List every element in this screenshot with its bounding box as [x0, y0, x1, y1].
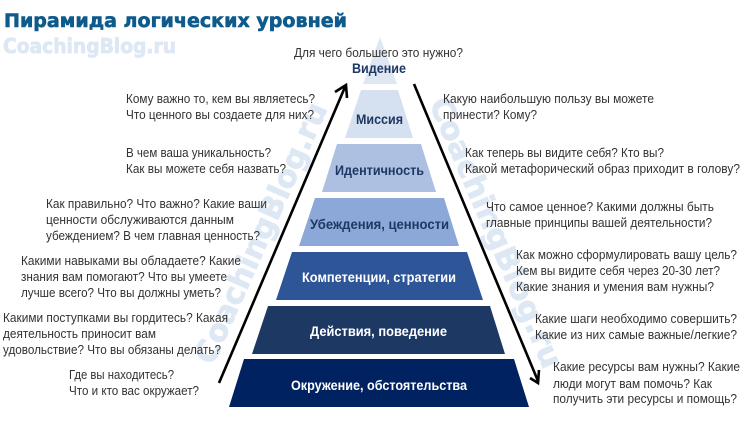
questions: environment, right: люди могут вам помочь? Как — [553, 376, 712, 391]
questions: identity, right: Как теперь вы видите себя? Кто вы? — [465, 145, 664, 160]
level: identity — [322, 144, 436, 192]
questions: competencies, right — [516, 247, 737, 294]
level: vision — [352, 37, 406, 84]
level: actions and behavior — [252, 306, 505, 354]
level: vision: Видение — [352, 60, 406, 76]
questions: beliefs, right: Что самое ценное? Какими должны быть — [486, 199, 714, 214]
questions: actions, left: Какими поступками вы гордитесь? Какая — [3, 310, 228, 325]
level: beliefs and values — [299, 198, 459, 246]
questions: beliefs, left: ценности обслуживаются данным — [46, 212, 234, 227]
questions: actions, left: удовольствие? Что вы обязаны делать? — [3, 342, 221, 357]
questions: competencies, left: знания вам помогают? Что вы умеете — [21, 269, 227, 284]
questions: mission, right — [443, 91, 654, 122]
questions: identity, left: Как вы можете себя назвать? — [126, 161, 286, 176]
questions: environment, left: Что и кто вас окружает? — [69, 383, 199, 398]
level: beliefs and values: Убеждения, ценности — [310, 216, 449, 232]
watermark: top-left site name: CoachingBlog.ru — [3, 34, 176, 58]
questions: environment, right — [553, 359, 740, 406]
questions: mission, left: Что ценного вы создаете для них? — [126, 107, 314, 122]
level: competencies and strategies: Компетенции, стратегии — [302, 269, 456, 285]
questions: actions, right — [535, 311, 737, 342]
level: mission: Миссия — [356, 111, 403, 127]
questions: beliefs, left: убеждением? В чем главная ценность? — [46, 228, 260, 243]
questions: competencies, left: лучше всего? Что вы должны уметь? — [21, 285, 221, 300]
watermark: right diagonal: CoachingBlog.ru — [422, 92, 569, 373]
questions: environment, right: Какие ресурсы вам нужны? Какие — [553, 359, 740, 374]
questions: beliefs, right: главные принципы вашей деятельности? — [486, 215, 712, 230]
pyramid — [229, 37, 529, 407]
questions: actions, right: Какие шаги необходимо совершить? — [535, 311, 737, 326]
questions: environment, right: получить эти ресурсы и помощь? — [553, 391, 737, 406]
questions: identity, left: В чем ваша уникальность? — [126, 145, 271, 160]
level: competencies and strategies — [276, 252, 483, 300]
questions: identity, right — [465, 145, 740, 176]
questions: identity, left — [126, 145, 286, 176]
questions: mission, left: Кому важно то, кем вы являетесь? — [126, 91, 315, 106]
questions: mission, right: Какую наибольшую пользу вы можете — [443, 91, 654, 106]
questions: beliefs, left — [46, 196, 267, 243]
level: mission — [345, 90, 413, 138]
questions: mission, right: принести? Кому? — [443, 107, 537, 122]
title: Пирамида логических уровней — [4, 10, 347, 32]
questions: actions, left — [3, 310, 228, 357]
questions: competencies, left: Какими навыками вы обладаете? Какие — [21, 253, 241, 268]
level: environment — [229, 359, 529, 407]
arrow: downward right side — [414, 84, 539, 383]
level: identity: Идентичность — [335, 162, 424, 178]
question: vision: Для чего большего это нужно? — [294, 45, 463, 60]
arrow: upward left side — [219, 85, 347, 383]
questions: environment, left: Где вы находитесь? — [69, 367, 174, 382]
questions: competencies, left — [21, 253, 241, 300]
questions: beliefs, right — [486, 199, 714, 230]
questions: environment, left — [69, 367, 199, 398]
questions: beliefs, left: Как правильно? Что важно? Какие ваши — [46, 196, 267, 211]
questions: actions, right: Какие из них самые важные/легкие? — [535, 327, 737, 342]
level: actions and behavior: Действия, поведение — [310, 323, 447, 339]
questions: competencies, right: Кем вы видите себя через 20-30 лет? — [516, 263, 720, 278]
watermark: left diagonal: CoachingBlog.ru — [188, 97, 335, 369]
questions: actions, left: деятельность приносит вам — [3, 326, 156, 341]
questions: mission, left — [126, 91, 315, 122]
questions: competencies, right: Какие знания и умения вам нужны? — [516, 279, 714, 294]
level: environment: Окружение, обстоятельства — [291, 377, 467, 393]
